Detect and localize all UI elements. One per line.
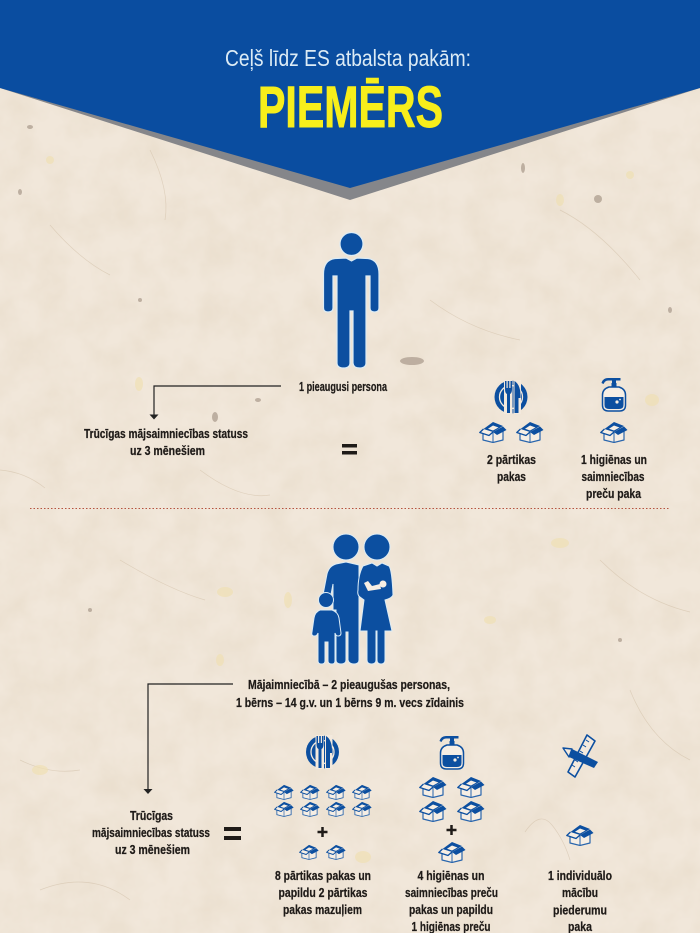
text: household status: [92, 808, 210, 857]
icons: four hygiene boxes: [420, 777, 484, 822]
icon: school supplies box: [567, 825, 594, 846]
icon: soap dispenser: [440, 736, 464, 769]
text: household status: Trūcīgas: [130, 808, 173, 823]
label: food packages: pakas: [497, 469, 526, 484]
hygiene packages column: [405, 736, 498, 933]
label: hygiene packages: 4 higiēnas un: [418, 868, 485, 883]
title: PIEMĒRS: [258, 75, 443, 140]
icon: family: [312, 534, 393, 664]
label: food packages: [487, 452, 536, 484]
label: school supplies package: 1 individuālo: [548, 868, 612, 883]
food packages column: [480, 380, 544, 484]
text: household status: uz 3 mēnešiem: [115, 842, 190, 857]
arrow: to household status: [150, 386, 281, 420]
school supplies column: [548, 735, 612, 933]
text: household composition: 1 bērns – 14 g.v. un 1 bērns 9 m. vecs zīdainis: [236, 695, 464, 710]
label: food packages: [275, 868, 371, 917]
label: hygiene package: 1 higiēnas un: [581, 452, 647, 467]
plus sign: [318, 827, 328, 837]
equals sign: [342, 444, 357, 454]
text: household status: uz 3 mēnešiem: [130, 443, 205, 458]
label: school supplies package: piederumu: [553, 902, 607, 918]
label: school supplies package: mācību: [562, 885, 598, 900]
label: hygiene package: preču paka: [586, 486, 642, 501]
subtitle: Ceļš līdz ES atbalsta pakām:: [225, 45, 471, 71]
label: hygiene package: [581, 452, 647, 501]
label: food packages: pakas mazuļiem: [283, 902, 362, 917]
icon: plate and cutlery: [494, 380, 528, 414]
label: hygiene package: saimniecības: [582, 469, 644, 484]
label: food packages: papildu 2 pārtikas: [278, 885, 368, 900]
food packages column: [275, 735, 372, 917]
section: single adult: [84, 232, 647, 501]
label: food packages: 2 pārtikas: [487, 452, 536, 467]
icon: extra hygiene box: [439, 842, 466, 862]
plus sign: [446, 825, 456, 835]
label: food packages: 8 pārtikas pakas un: [275, 868, 371, 883]
label: 1 adult: 1 pieaugusi persona: [299, 379, 388, 394]
icons: food boxes: [480, 422, 544, 442]
icon: ruler and pencil: [563, 735, 598, 777]
text: household composition: Mājaimniecībā – 2 pieaugušas personas,: [248, 677, 450, 692]
equals sign: [224, 827, 241, 840]
icons: eight food boxes: [275, 785, 372, 816]
label: hygiene packages: saimniecības preču: [405, 885, 498, 900]
icon: hygiene box: [601, 422, 628, 442]
text: household status: Trūcīgas mājsaimniecības statuss: [84, 426, 248, 441]
icon: plate and cutlery: [306, 735, 339, 769]
icon: baby: [364, 580, 386, 591]
label: school supplies package: [548, 868, 612, 933]
icon: soap dispenser: [602, 378, 626, 411]
label: hygiene packages: pakas un papildu: [409, 902, 493, 917]
arrow: to household status: [144, 684, 233, 794]
hygiene package column: [581, 378, 647, 501]
icon: adult person: [324, 232, 379, 368]
section: family: [92, 534, 612, 933]
text: household status: [84, 426, 248, 458]
icons: two baby food boxes: [300, 845, 346, 860]
text: household status: mājsaimniecības statuss: [92, 825, 210, 840]
text: household composition: [236, 677, 464, 710]
header banner: [0, 0, 700, 200]
label: hygiene packages: [405, 868, 498, 933]
